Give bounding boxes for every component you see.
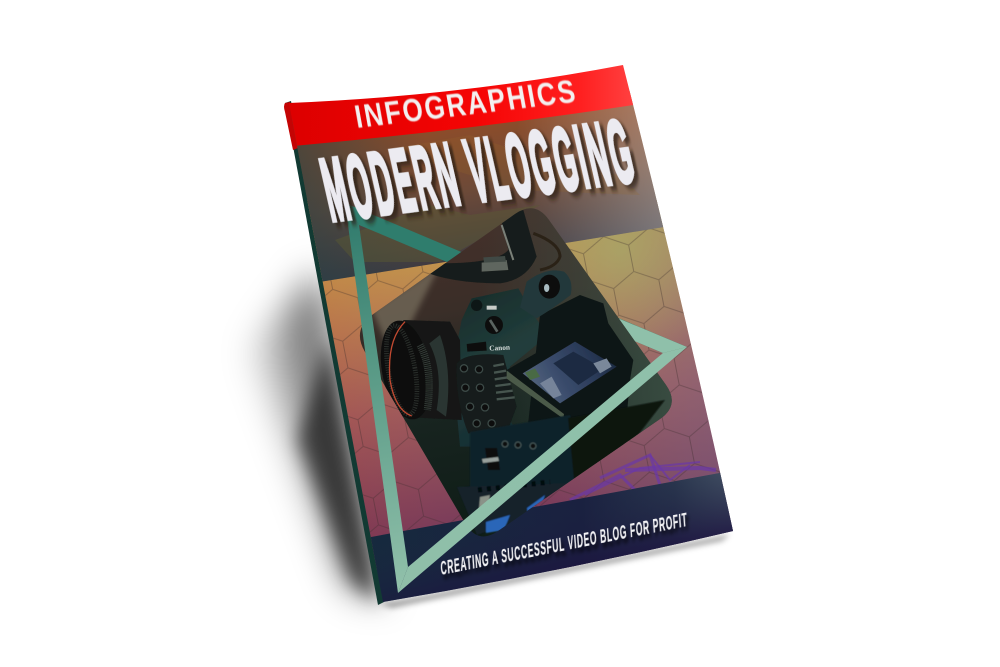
subtitle: CREATING A SUCCESSFUL VIDEO BLOG FOR PROFIT xyxy=(440,508,688,580)
purple ribbon details xyxy=(570,455,716,500)
book cover xyxy=(280,55,745,615)
top dial and controls xyxy=(467,300,503,352)
heading: INFOGRAPHICS: INFOGRAPHICS xyxy=(352,73,580,136)
carry handle xyxy=(420,210,560,283)
book spine xyxy=(284,101,384,605)
camera body xyxy=(455,288,548,447)
right grip xyxy=(527,295,633,480)
panel: upper title band xyxy=(280,90,670,285)
lower right edge of triangle xyxy=(398,347,687,593)
triangle frame over photo xyxy=(345,203,687,593)
photo panel: video camera xyxy=(360,208,672,536)
camera upper section xyxy=(374,210,633,480)
triangle frame upper edge xyxy=(345,203,687,353)
camera lower section xyxy=(457,400,665,535)
infographic book mockup xyxy=(241,65,733,618)
panel: hexagon background xyxy=(307,186,733,570)
viewfinder xyxy=(520,270,571,318)
panel: red header band xyxy=(289,65,634,146)
left edge of triangle xyxy=(345,203,408,593)
brand name: Canon xyxy=(489,343,510,353)
drop shadow of the book xyxy=(252,270,730,608)
lens xyxy=(380,320,462,420)
photo backdrop xyxy=(360,208,672,536)
flip-out LCD screen xyxy=(506,342,616,417)
panel: bottom navy band xyxy=(370,472,733,602)
title: MODERN VLOGGING: MODERN VLOGGING xyxy=(313,102,644,241)
button panel xyxy=(456,354,517,433)
